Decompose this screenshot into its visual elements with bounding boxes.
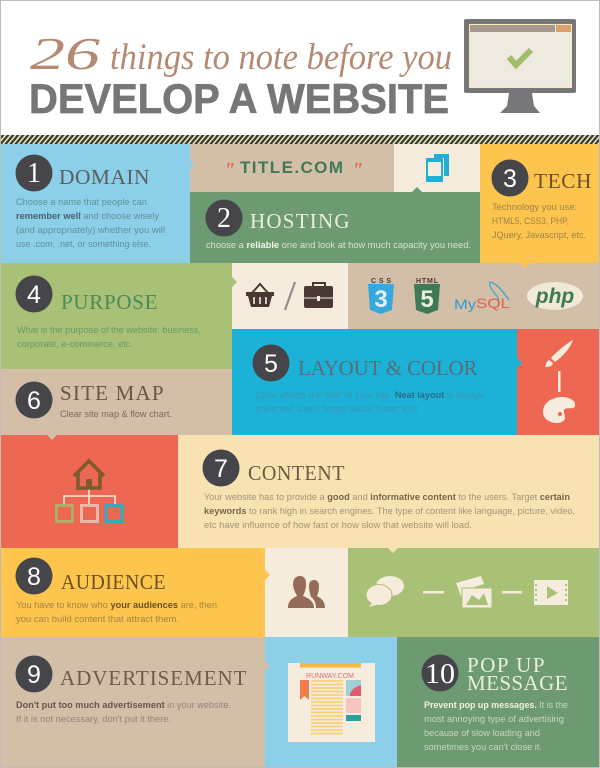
panel: 5 layout and color xyxy=(232,329,517,435)
panel: 4 purpose: corporate, e-commerce, etc. xyxy=(17,339,133,350)
panel: 1 domain xyxy=(0,144,190,263)
title: DEVELOP A WEBSITE xyxy=(29,75,449,122)
icon: html5: HTML xyxy=(416,278,439,285)
icon: css3: CSS xyxy=(371,278,391,285)
panel: 1 domain: 1 xyxy=(27,158,41,189)
panel: 8 audience xyxy=(0,548,265,637)
panel: 6 site map: Clear site map & flow chart. xyxy=(60,409,172,420)
icon: monitor with check mark xyxy=(464,19,576,113)
icon: css3 xyxy=(368,278,394,314)
panel: 5 layout and color: preferred. Don't forget about footer too! xyxy=(255,404,418,415)
panel: 8 audience: 8 xyxy=(27,563,41,591)
panel: shopping and business icons xyxy=(232,263,348,329)
icon: html5 xyxy=(414,278,440,314)
panel: 1 domain: (and appropriately) whether you will xyxy=(16,225,165,236)
title xyxy=(29,28,452,122)
panel: 9 advertisement: Don't put too much advertisement in your website. xyxy=(16,700,231,711)
panel: 7 content: Your website has to provide a good and informative content to the users. Target certain xyxy=(204,492,570,503)
panel: 7 content xyxy=(178,435,600,548)
panel: 4 purpose: 4 xyxy=(27,281,41,309)
icon: briefcase xyxy=(304,283,333,308)
panel: 8 audience: AUDIENCE xyxy=(61,570,166,594)
panel: 2 hosting: choose a reliable one and look at how much capacity you need. xyxy=(206,240,471,251)
panel: 9 advertisement: If it is not necessary, don't put it there. xyxy=(16,714,171,725)
panel: media icons xyxy=(348,548,600,637)
panel: 4 purpose: PURPOSE xyxy=(61,290,158,314)
panel: 1 domain: DOMAIN xyxy=(59,165,150,189)
panel: 5 layout and color: LAYOUT & COLOR xyxy=(298,356,478,380)
panel: paint icons xyxy=(517,329,600,435)
panel: 1 domain: Choose a name that people can xyxy=(16,197,147,208)
panel: title.com: " xyxy=(352,159,363,181)
panel: technology logos xyxy=(348,263,600,329)
panel: 8 audience: you can build content that attract them. xyxy=(16,614,179,625)
panel: 10 pop up message: because of slow loading and xyxy=(424,728,540,739)
panel: 4 purpose: What is the purpose of the website: business, xyxy=(17,325,201,336)
panel: people icon xyxy=(265,548,348,637)
panel: 1 domain: use .com, .net, or something else. xyxy=(16,239,151,250)
icon: mysql: SQL xyxy=(476,295,510,311)
panel: title.com: TITLE.COM xyxy=(240,158,343,177)
panel: 2 hosting xyxy=(190,187,480,263)
icon: css3: 3 xyxy=(374,286,388,313)
panel: 6 site map: 6 xyxy=(27,387,41,415)
panel: 10 pop up message: 10 xyxy=(425,659,455,690)
icon: basket xyxy=(246,284,274,307)
panel: 3 tech: Technology you use: xyxy=(492,202,577,213)
panel: 2 hosting: HOSTING xyxy=(250,209,350,233)
panel: 3 tech: HTML5, CSS3, PHP, xyxy=(492,216,569,227)
panel: devices icon xyxy=(394,144,480,192)
panel: 10 pop up message: Prevent pop up messages. It is the xyxy=(424,700,568,711)
panel: site map icon xyxy=(0,435,178,548)
panel: 9 advertisement xyxy=(0,637,265,768)
panel: 10 pop up message: sometimes you can't close it. xyxy=(424,742,542,753)
icon: php: php xyxy=(535,285,574,308)
title: things to note before you xyxy=(110,37,452,78)
panel: 7 content: etc have influence of how fast or how slow that website will load. xyxy=(204,520,472,531)
panel: 1 domain: remember well and choose wisely xyxy=(16,211,159,222)
icon: html5: 5 xyxy=(420,286,434,313)
panel: 4 purpose xyxy=(0,263,232,369)
panel: 2 hosting: 2 xyxy=(217,203,231,234)
panel: 3 tech: JQuery, Javascript, etc. xyxy=(492,230,586,241)
panel: runway.com website mockup xyxy=(265,637,397,768)
icon: brush xyxy=(545,340,573,367)
panel: 7 content: keywords to rank high in search engines. The type of content like language, picture, video, xyxy=(204,506,575,517)
title: 26 xyxy=(30,28,100,79)
panel: 10 pop up message xyxy=(397,637,600,768)
icon: palette xyxy=(543,397,575,423)
icon: mysql xyxy=(454,282,510,312)
panel: 9 advertisement: 9 xyxy=(27,661,41,689)
icon: video xyxy=(534,580,568,605)
panel: 6 site map: SITE MAP xyxy=(60,381,164,405)
panel: 6 site map xyxy=(0,369,232,435)
panel: 3 tech: 3 xyxy=(503,165,517,193)
panel: 8 audience: You have to know who your audiences are, then xyxy=(16,600,217,611)
icon: speech bubbles xyxy=(366,576,404,607)
icon: php xyxy=(527,282,583,310)
panel: 5 layout and color: Color affects the 'feel' of your site. Neat layout is always xyxy=(255,390,484,401)
panel: 7 content: 7 xyxy=(214,455,228,483)
panel: runway.com website mockup: RUNWAY.COM xyxy=(306,671,354,680)
panel: title.com xyxy=(190,144,394,192)
panel: 3 tech: TECH xyxy=(534,169,592,193)
panel: 10 pop up message: POP UP xyxy=(467,653,545,677)
panel: title.com: " xyxy=(224,159,235,181)
panel: 3 tech xyxy=(480,144,600,268)
panel: 10 pop up message: MESSAGE xyxy=(467,671,568,695)
panel: 9 advertisement: ADVERTISEMENT xyxy=(60,666,247,690)
icon: flow chart xyxy=(56,461,122,522)
icon: images xyxy=(456,576,492,608)
panel: 10 pop up message: most annoying type of advertising xyxy=(424,714,564,725)
icon: mysql: My xyxy=(454,296,476,312)
panel: 7 content: CONTENT xyxy=(248,461,345,485)
panel: 5 layout and color: 5 xyxy=(264,350,278,378)
